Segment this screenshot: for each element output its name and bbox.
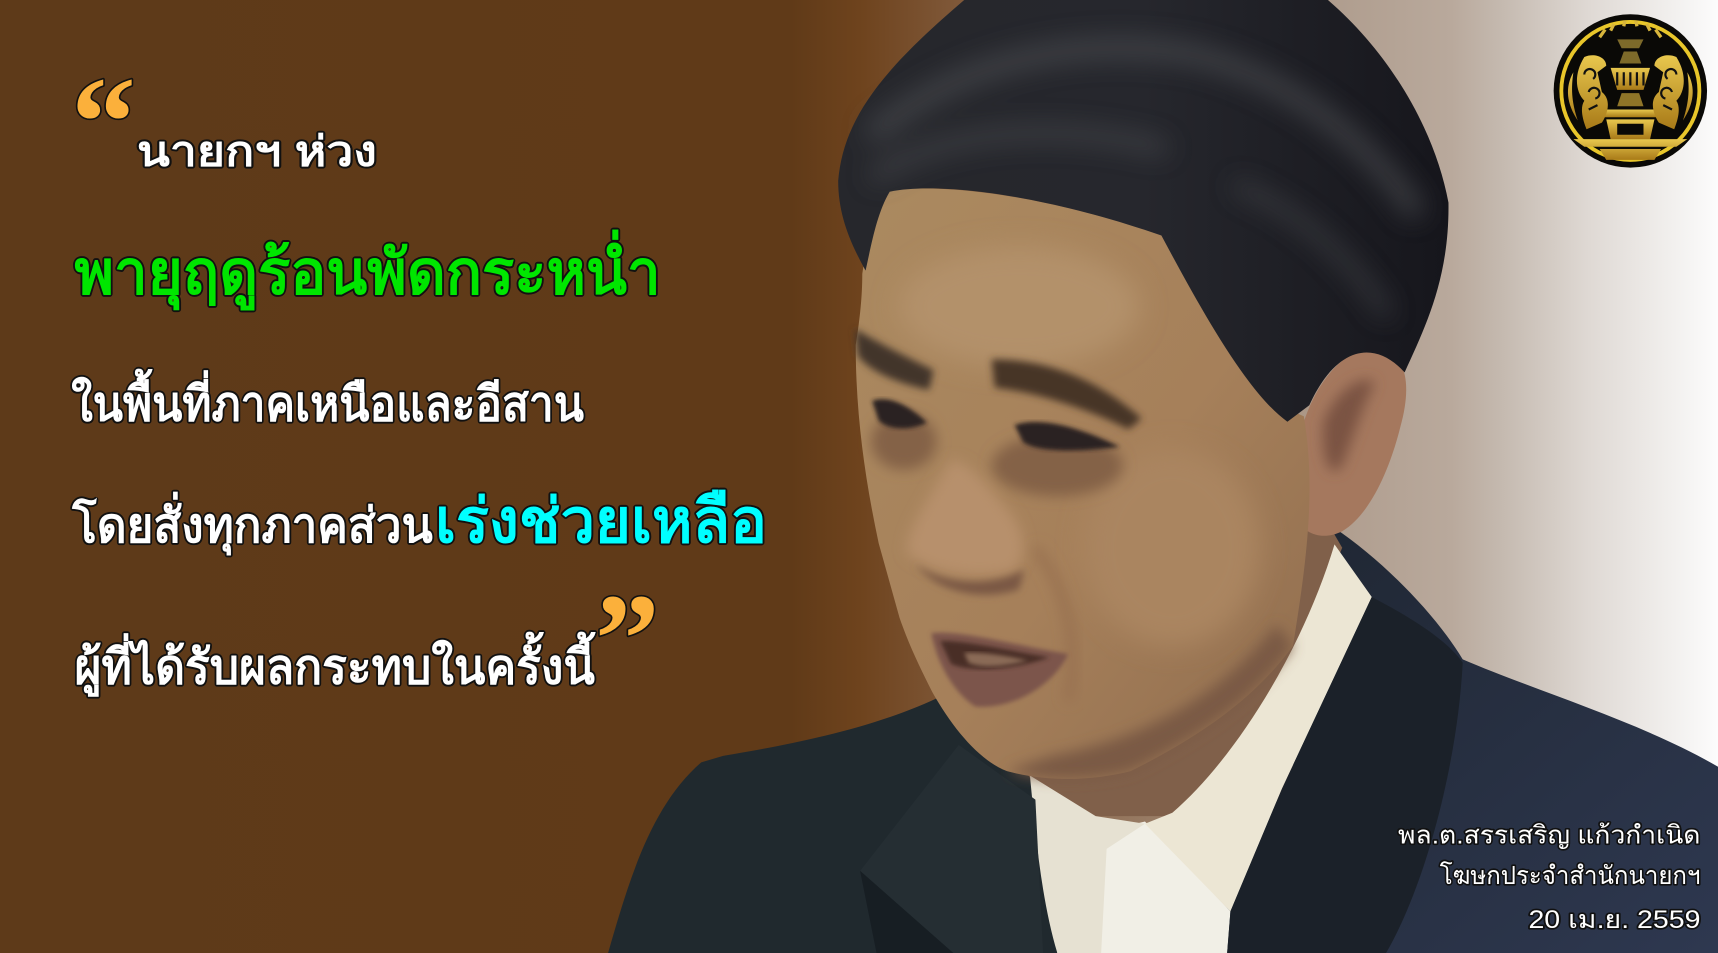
left lion	[1577, 55, 1608, 129]
right eyebrow	[992, 359, 1142, 429]
right lion	[1653, 55, 1684, 129]
seal artwork	[1568, 39, 1693, 160]
photo: spokesman portrait	[608, 0, 1718, 953]
right collar wing	[1145, 544, 1372, 911]
pedestal top	[1591, 110, 1670, 117]
caption: spokesman name and date	[1398, 821, 1700, 934]
suit lapel right	[1227, 597, 1463, 953]
caption line 3: 20 เม.ย. 2559	[1528, 906, 1700, 934]
smile fold	[1035, 548, 1072, 701]
line 4 start: โดยสั่งทุกภาคส่วน	[71, 491, 433, 556]
lapel shadow	[860, 871, 953, 953]
pedestal legs	[1606, 119, 1654, 139]
line 2: green highlight: พายุฤดูร้อนพัดกระหน่ำ	[75, 230, 661, 311]
bowl	[1611, 68, 1650, 90]
suit lapel left	[860, 745, 1043, 953]
caption line 2: โฆษกประจำสำนักนายกฯ	[1440, 861, 1700, 890]
ear	[1296, 347, 1406, 536]
seal: office of the prime minister	[1554, 14, 1707, 168]
base	[1573, 139, 1687, 160]
ear inner	[1323, 380, 1375, 471]
right flame	[1683, 72, 1693, 120]
left eye	[872, 399, 927, 428]
left flame	[1568, 72, 1578, 120]
rays above bowl	[1600, 21, 1661, 37]
quote text block	[71, 50, 767, 710]
nose underside	[915, 564, 1024, 595]
jaw shadow	[1007, 624, 1293, 779]
hair strands	[877, 48, 1413, 312]
cheek tone	[1085, 449, 1260, 646]
left collar wing	[1030, 776, 1145, 953]
bowl cover	[1617, 39, 1643, 64]
shirt collar	[1030, 544, 1372, 953]
forehead highlight	[898, 246, 1139, 367]
seal disc	[1554, 14, 1707, 168]
line 4: cyan highlight: เร่งช่วยเหลือ	[435, 486, 767, 555]
shirt body	[1052, 822, 1230, 953]
neck	[986, 482, 1342, 816]
left eyebrow	[855, 329, 934, 390]
bowl details	[1617, 72, 1643, 85]
mouth opening	[940, 641, 1050, 669]
right eye	[1015, 422, 1120, 451]
eye bag left	[871, 413, 937, 470]
suit left shoulder	[608, 694, 1063, 953]
bowl stem	[1617, 93, 1643, 106]
teeth	[964, 653, 1028, 666]
line 5: ผู้ที่ได้รับผลกระทบในครั้งนี้	[75, 632, 596, 698]
suit right shoulder	[1205, 528, 1718, 953]
nose	[907, 460, 1023, 575]
line 3: ในพื้นที่ภาคเหนือและอีสาน	[71, 369, 584, 432]
seal gold ring	[1561, 22, 1699, 160]
closing quote mark: ”	[595, 567, 660, 710]
caption line 1: พล.ต.สรรเสริญ แก้วกำเนิด	[1398, 821, 1700, 849]
lion markings	[1584, 69, 1676, 110]
lips	[931, 633, 1068, 707]
line 1: นายกฯ ห่วง	[137, 127, 377, 174]
ear outer	[1296, 347, 1406, 536]
hair	[838, 0, 1449, 422]
eye bag right	[992, 435, 1123, 496]
opening quote mark: “	[71, 50, 136, 193]
face	[856, 188, 1310, 779]
